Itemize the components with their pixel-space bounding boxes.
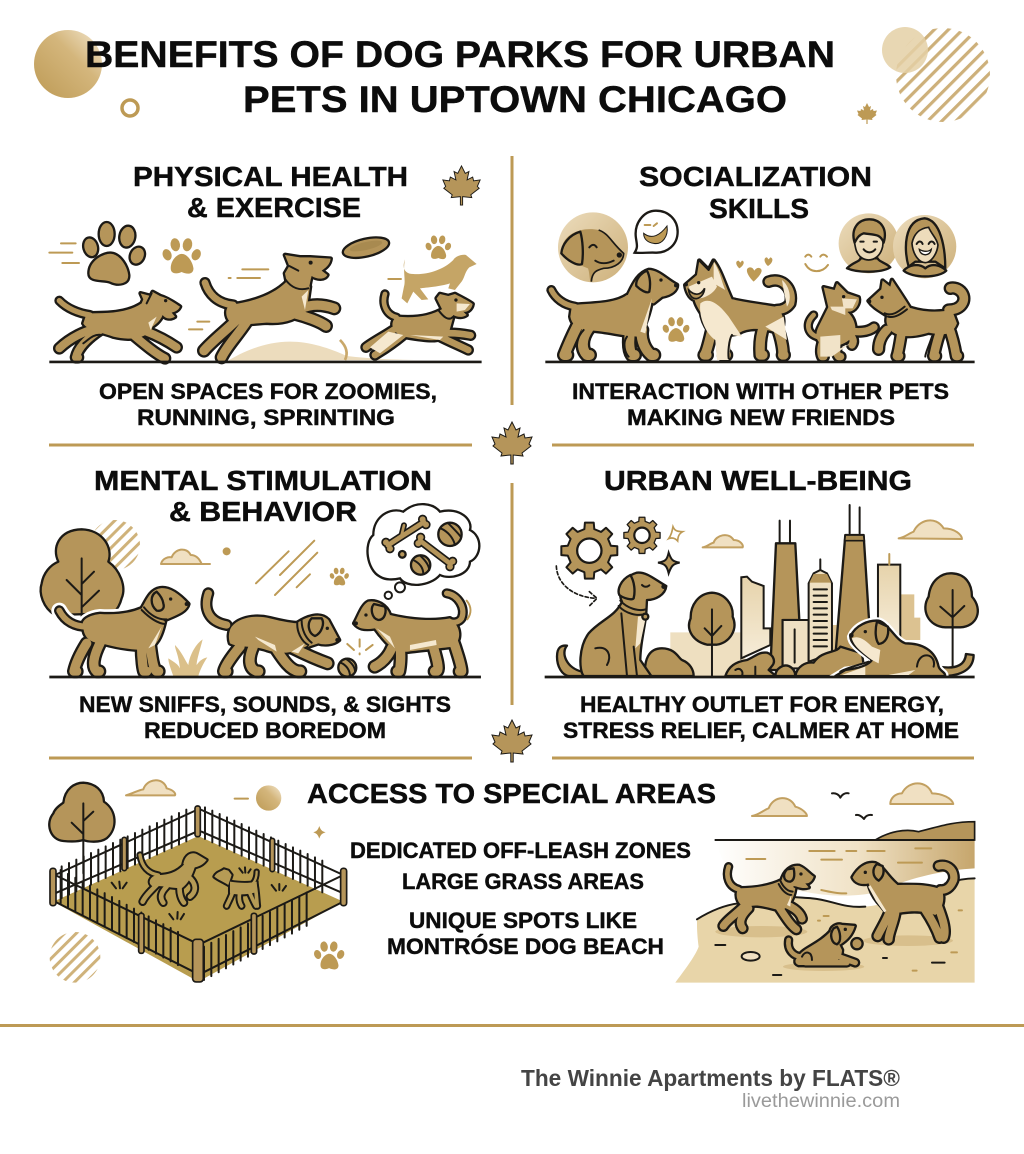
text: special areas list: DEDICATED OFF-LEASH ZONES	[350, 838, 691, 863]
panel: access to special areas	[49, 778, 975, 983]
heading: physical health	[133, 161, 408, 223]
illustration: running dogs	[49, 222, 482, 362]
heading: physical health: PHYSICAL HEALTH	[133, 161, 408, 192]
illustration: fenced park	[49, 780, 347, 983]
title: PETS IN UPTOWN CHICAGO	[243, 79, 787, 120]
text: special areas list: MONTRÓSE DOG BEACH	[387, 934, 664, 959]
panel: mental stimulation and behavior	[41, 465, 481, 743]
heading: socialization: SKILLS	[709, 193, 809, 224]
footer: brand and website	[521, 1065, 900, 1112]
heading: urban well-being: URBAN WELL-BEING	[604, 465, 912, 496]
panel: urban well-being	[545, 465, 978, 743]
caption: physical health	[99, 379, 437, 430]
decoration: top right striped circles	[857, 27, 990, 124]
title	[85, 34, 835, 120]
title: BENEFITS OF DOG PARKS FOR URBAN	[85, 34, 835, 75]
heading: mental stimulation	[94, 465, 432, 527]
caption: physical health: OPEN SPACES FOR ZOOMIES,	[99, 379, 437, 404]
caption: urban well-being: HEALTHY OUTLET FOR ENERGY,	[580, 692, 944, 717]
dividers and center leaves	[49, 156, 974, 762]
caption: socialization	[572, 379, 949, 430]
heading: physical health: & EXERCISE	[187, 192, 361, 223]
caption: mental stimulation: NEW SNIFFS, SOUNDS, & SIGHTS	[79, 692, 451, 717]
text: special areas list	[350, 838, 691, 959]
caption: mental stimulation	[79, 692, 451, 743]
text: special areas list: UNIQUE SPOTS LIKE	[409, 908, 637, 933]
caption: physical health: RUNNING, SPRINTING	[137, 405, 395, 430]
heading: mental stimulation: MENTAL STIMULATION	[94, 465, 432, 496]
caption: socialization: MAKING NEW FRIENDS	[627, 405, 895, 430]
panel: socialization skills	[545, 161, 975, 430]
panel: physical health and exercise	[49, 161, 482, 430]
illustration: sniffing dogs	[41, 504, 481, 677]
caption: urban well-being: STRESS RELIEF, CALMER AT HOME	[563, 718, 959, 743]
heading: socialization: SOCIALIZATION	[639, 161, 872, 192]
caption: mental stimulation: REDUCED BOREDOM	[144, 718, 386, 743]
footer rule	[0, 1024, 1024, 1027]
heading: access to special areas: ACCESS TO SPECIAL AREAS	[307, 778, 716, 809]
decoration: top left circles	[34, 30, 138, 116]
heading: socialization	[639, 161, 872, 224]
illustration: montrose dog beach	[675, 783, 975, 983]
footer: brand and website: livethewinnie.com	[742, 1091, 900, 1112]
text: special areas list: LARGE GRASS AREAS	[402, 869, 644, 894]
caption: urban well-being	[563, 692, 959, 743]
heading: mental stimulation: & BEHAVIOR	[169, 496, 357, 527]
illustration: chicago skyline and calm dogs	[545, 505, 978, 677]
illustration: dogs meeting	[545, 211, 975, 362]
icon: maple leaf	[443, 166, 480, 205]
footer: brand and website: The Winnie Apartments by FLATS®	[521, 1065, 900, 1091]
caption: socialization: INTERACTION WITH OTHER PETS	[572, 379, 949, 404]
